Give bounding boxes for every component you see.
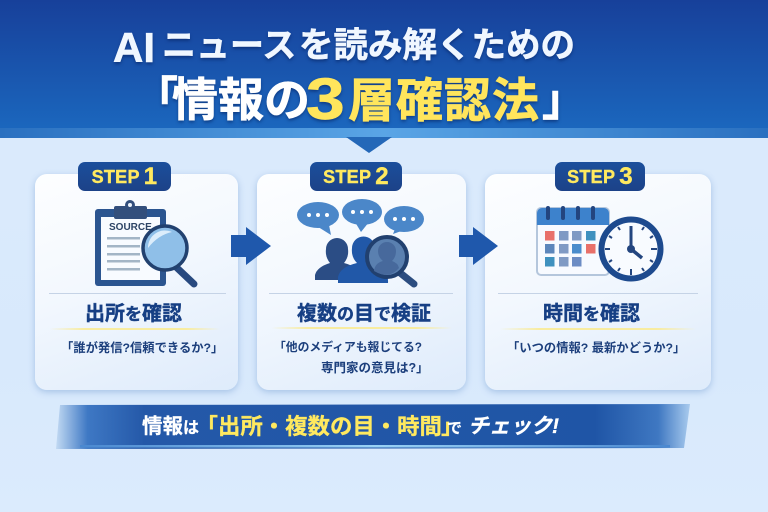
title line 1: を読み解くための [299,27,575,65]
banner text: で [447,420,462,437]
title line 2: 情報の [172,74,310,126]
icon: calendar and clock [536,206,664,282]
step 2 question: 「他のメディアも報じてる? [274,340,422,354]
bottom summary banner [56,404,690,449]
step 1 question: 「誰が発信?信頼できるか?」 [61,341,223,355]
badge: step 3 [555,162,645,191]
header banner [0,0,768,138]
step 3 question: 「いつの情報? 最新かどうか?」 [507,341,685,355]
banner text: 」 [441,414,463,439]
title line 1: AI [113,24,155,71]
badge: step 1 [78,162,171,191]
title line 2: 層確認法 [348,74,540,127]
badge: step 1: STEP1 [92,163,157,190]
title line 2: 3 [306,67,345,132]
title line 2 [134,67,586,132]
step 2 heading: 複数の目で検証 [297,303,431,325]
banner text: 情報は [142,415,199,438]
icon: people with speech bubbles and magnifier [297,199,424,288]
banner text: チェック! [468,415,559,438]
title line 2: 」 [542,76,586,125]
arrow: step 1 to 2 [231,227,271,265]
title line 1: ニュース [162,27,296,65]
badge: step 3: STEP3 [567,163,633,190]
panel: step 3 [485,174,711,390]
arrow: step 2 to 3 [459,227,498,265]
step 3 heading: 時間を確認 [543,303,640,325]
title line 1 [113,24,575,71]
banner text: 出所・複数の目・時間 [218,414,442,439]
icon: clipboard with magnifier: SOURCE [109,222,152,233]
icon: clipboard with magnifier [95,200,198,288]
divider [498,293,698,294]
panel: step 1 [35,174,238,390]
header light band [0,128,768,138]
step 1 heading: 出所を確認 [85,303,182,325]
header pointer triangle [346,137,392,153]
title line 2: 「 [134,74,178,123]
banner text [142,414,559,439]
banner text: 「 [196,414,218,439]
panel: step 2 [257,174,466,390]
badge: step 2 [310,162,402,191]
divider [269,293,453,294]
divider [49,293,226,294]
panel: step 2: 専門家の意見は?」 [321,361,429,375]
badge: step 2: STEP2 [323,163,389,190]
